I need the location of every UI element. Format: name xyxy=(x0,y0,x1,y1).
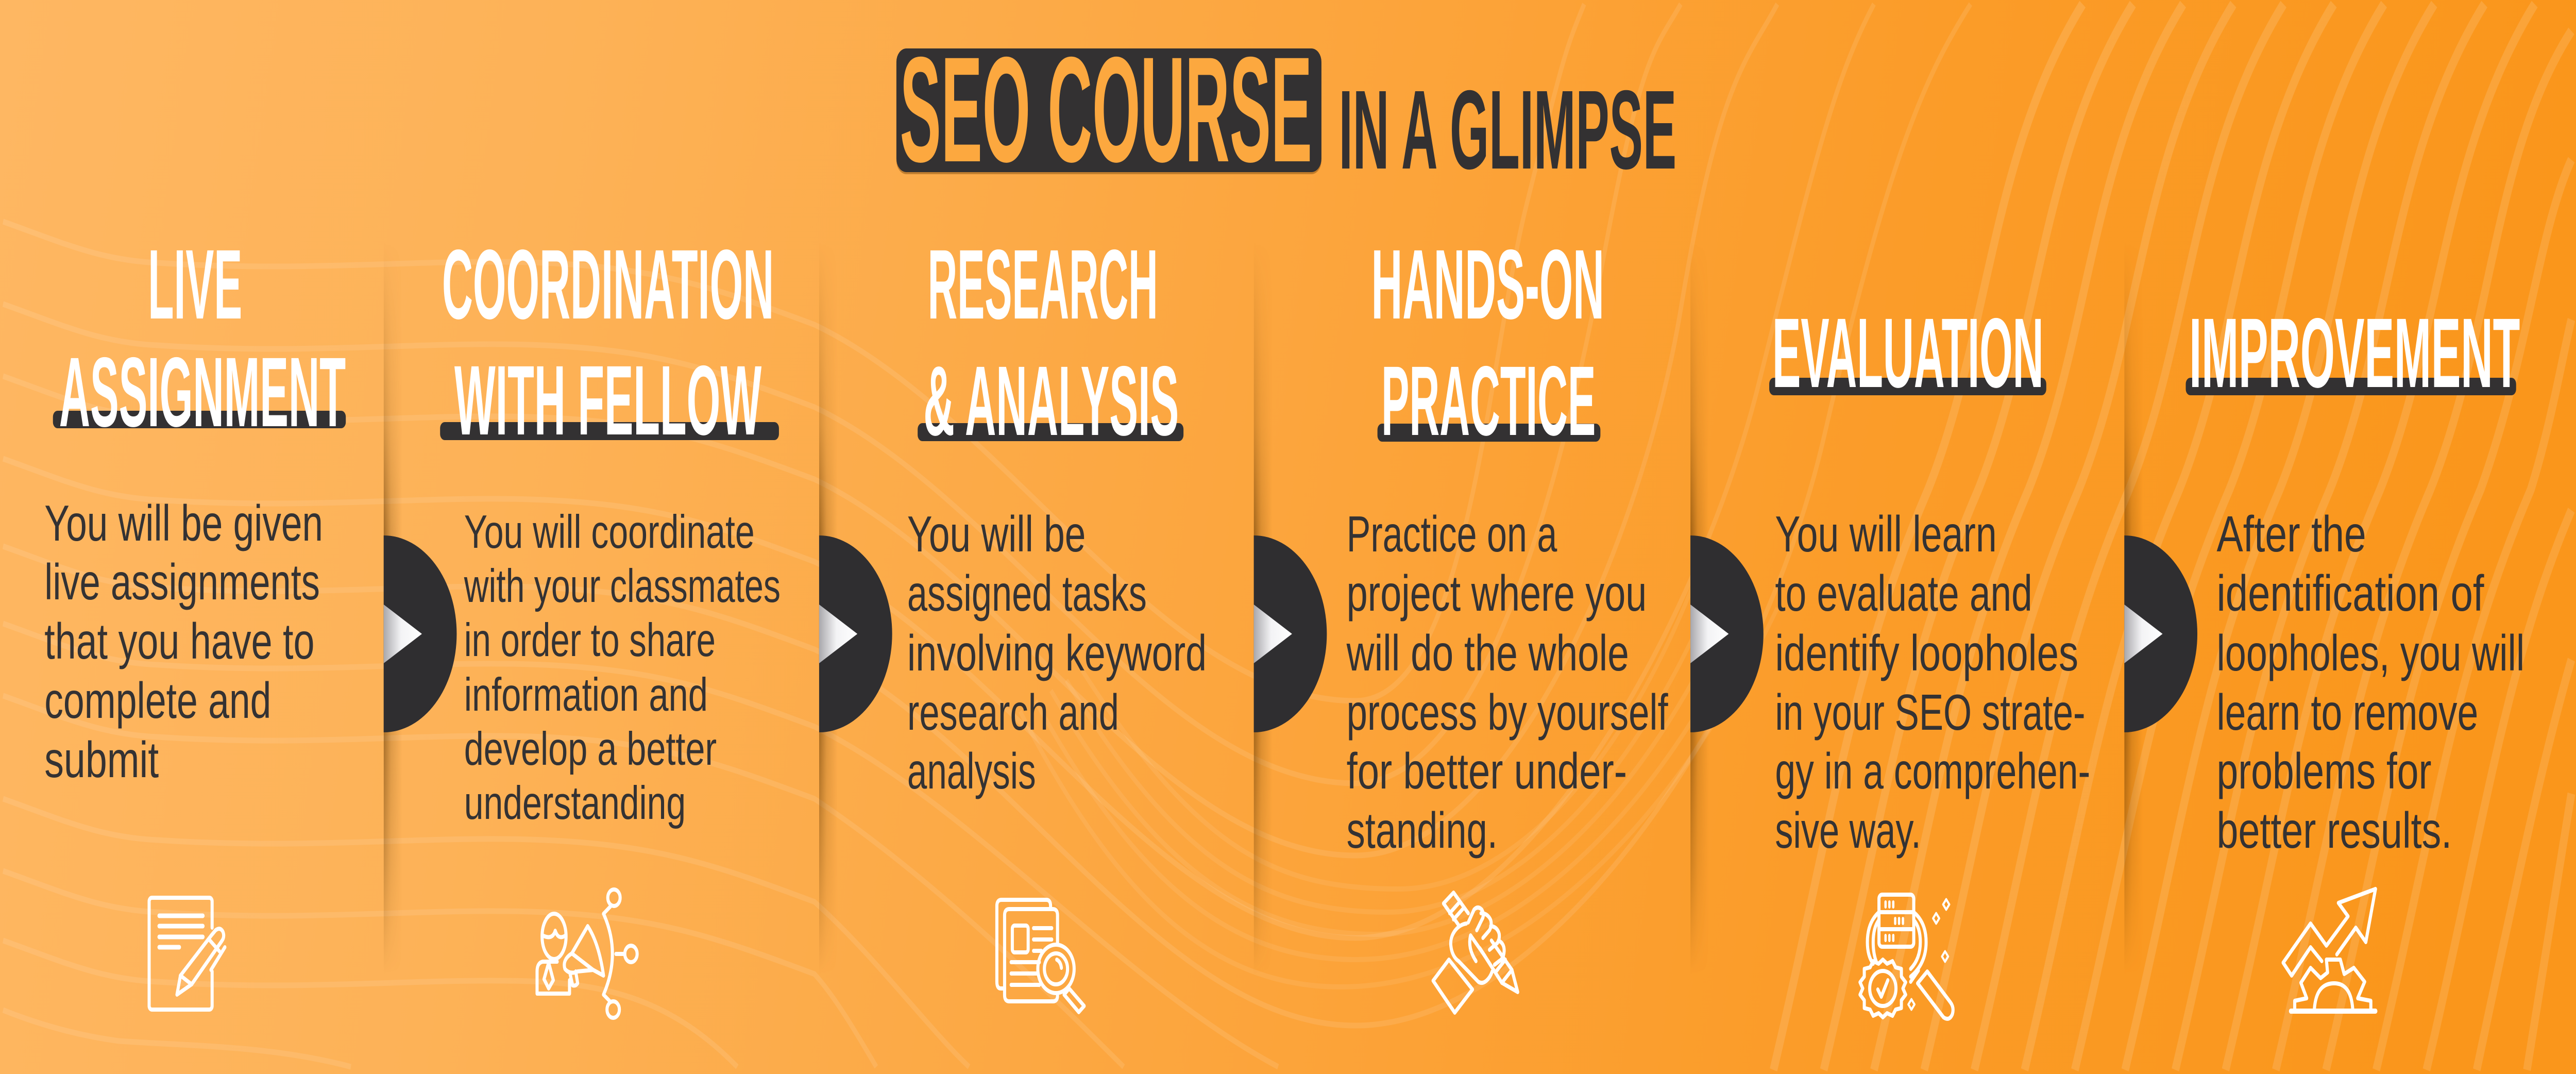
title xyxy=(896,25,1676,193)
heading: live assignment: LIVE xyxy=(148,229,242,340)
body text: coordination with fellow: develop a better xyxy=(464,723,717,775)
panel: hands-on practice xyxy=(1346,229,1668,1013)
body text: evaluation: to evaluate and xyxy=(1775,566,2032,622)
body text: evaluation: gy in a comprehen- xyxy=(1775,744,2090,799)
icon: document and pencil xyxy=(149,898,225,1010)
heading: evaluation xyxy=(1769,297,2046,408)
body text: research and analysis xyxy=(907,507,1207,799)
arrow: step 5 to 6 xyxy=(2124,535,2197,732)
body text: hands-on practice xyxy=(1346,507,1668,859)
heading: hands-on practice: HANDS-ON xyxy=(1371,229,1604,340)
icon: growth arrow and gear xyxy=(2283,889,2376,1011)
body text: evaluation: You will learn xyxy=(1775,507,1997,562)
title badge: SEO COURSE xyxy=(896,25,1321,193)
panel: research and analysis xyxy=(907,229,1207,1012)
arrow: step 1 to 2 xyxy=(384,535,456,732)
heading: research and analysis xyxy=(918,229,1183,456)
body text: hands-on practice: project where you xyxy=(1347,566,1647,622)
body text: coordination with fellow: You will coordinate xyxy=(464,506,755,558)
body text: improvement: better results. xyxy=(2217,803,2452,859)
body text: hands-on practice: will do the whole xyxy=(1346,626,1629,681)
icon: documents and magnifier xyxy=(997,900,1084,1012)
body text: coordination with fellow: understanding xyxy=(464,777,686,829)
body text: evaluation: identify loopholes xyxy=(1775,626,2078,681)
body text: live assignment: complete and xyxy=(44,673,271,729)
body text: live assignment: You will be given xyxy=(44,496,323,551)
panel: improvement xyxy=(2186,297,2524,1011)
body text: research and analysis: analysis xyxy=(907,744,1036,799)
body text: hands-on practice: process by yourself xyxy=(1347,685,1668,741)
heading: research and analysis: RESEARCH xyxy=(928,229,1158,340)
body text: improvement: After the xyxy=(2217,507,2366,562)
body text: evaluation xyxy=(1775,507,2090,859)
body text: live assignment xyxy=(44,496,323,788)
body text: coordination with fellow xyxy=(464,506,781,829)
body text: live assignment: that you have to xyxy=(44,614,314,669)
title badge: SEO COURSE: SEO COURSE xyxy=(900,25,1312,193)
body text: hands-on practice: standing. xyxy=(1347,803,1498,859)
arrow: step 3 to 4 xyxy=(1254,535,1327,732)
heading: coordination with fellow: WITH FELLOW xyxy=(454,345,761,456)
body text: research and analysis: research and xyxy=(907,685,1119,741)
arrow: step 4 to 5 xyxy=(1690,535,1764,732)
heading: research and analysis: & ANALYSIS xyxy=(923,345,1179,456)
body text: improvement: identification of xyxy=(2217,566,2484,622)
heading: hands-on practice xyxy=(1371,229,1604,456)
body text: hands-on practice: for better under- xyxy=(1347,744,1627,799)
panel: live assignment xyxy=(44,229,346,1010)
body text: coordination with fellow: with your classmates xyxy=(464,560,781,612)
icon: person with megaphone and network xyxy=(537,890,637,1018)
icon: magnifier, server and gear xyxy=(1860,895,1953,1019)
body text: evaluation: in your SEO strate- xyxy=(1775,685,2086,741)
body text: improvement: learn to remove xyxy=(2217,685,2478,741)
heading: coordination with fellow xyxy=(440,229,779,456)
panel: evaluation xyxy=(1769,297,2090,1019)
body text: research and analysis: You will be xyxy=(907,507,1086,562)
body text: research and analysis: involving keyword xyxy=(907,626,1207,681)
icon: hand holding pen xyxy=(1433,893,1518,1013)
body text: live assignment: submit xyxy=(44,732,159,788)
body text: coordination with fellow: in order to share xyxy=(464,614,716,666)
panel: coordination with fellow xyxy=(440,229,781,1018)
heading: live assignment xyxy=(53,229,346,447)
heading: live assignment: ASSIGNMENT xyxy=(59,337,346,447)
body text: live assignment: live assignments xyxy=(44,555,320,610)
title suffix: IN A GLIMPSE: IN A GLIMPSE xyxy=(1339,67,1676,192)
arrow: step 2 to 3 xyxy=(819,535,892,732)
body text: coordination with fellow: information and xyxy=(464,669,708,721)
heading: improvement: IMPROVEMENT xyxy=(2189,297,2520,408)
body text: improvement: problems for xyxy=(2217,744,2432,799)
heading: hands-on practice: PRACTICE xyxy=(1381,345,1596,456)
heading: evaluation: EVALUATION xyxy=(1772,297,2044,408)
heading: coordination with fellow: COORDINATION xyxy=(442,229,774,340)
body text: evaluation: sive way. xyxy=(1775,803,1921,859)
body text: improvement xyxy=(2217,507,2524,859)
body text: hands-on practice: Practice on a xyxy=(1347,507,1557,562)
body text: improvement: loopholes, you will xyxy=(2217,626,2524,681)
body text: research and analysis: assigned tasks xyxy=(907,566,1147,622)
